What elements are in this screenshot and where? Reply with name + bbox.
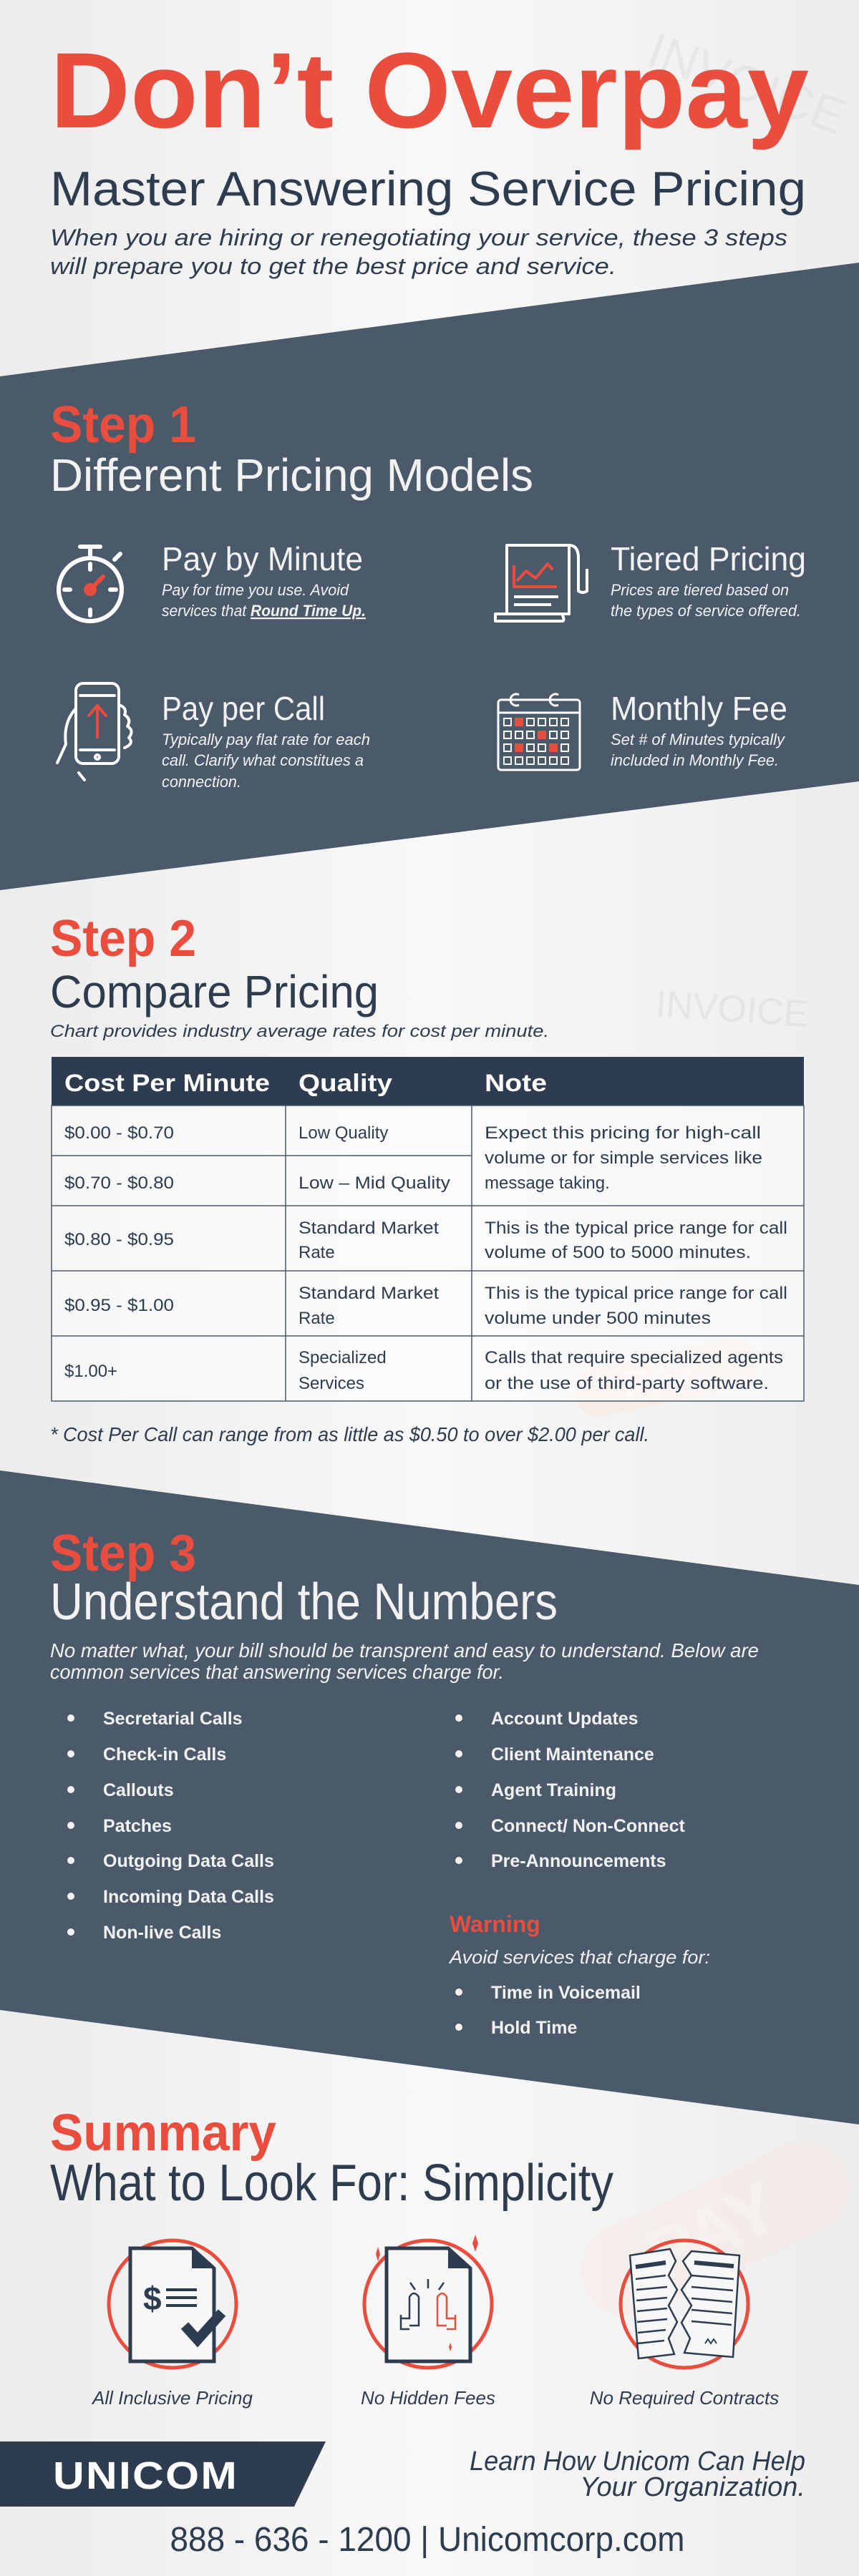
summary heading xyxy=(50,2104,613,2212)
faint decorative invoices: INVOICE xyxy=(641,22,853,145)
tiered pricing: Prices are tiered based on xyxy=(611,581,789,599)
step 3 heading: Understand the Numbers xyxy=(50,1574,558,1631)
icon: no required contracts xyxy=(621,2240,748,2368)
monthly fee: Monthly Fee xyxy=(611,690,787,727)
icon: tiered pricing document xyxy=(495,545,587,621)
table: pricing: Specialized xyxy=(299,1348,387,1367)
icon: phone in hand xyxy=(57,683,132,780)
table: pricing: Expect this pricing for high-call xyxy=(485,1123,761,1143)
table: pricing: Calls that require specialized agents xyxy=(485,1348,783,1367)
footnote: * Cost Per Call can range from as little as $0.50 to over $2.00 per call. xyxy=(50,1423,649,1445)
icon: calendar xyxy=(498,694,580,770)
table: pricing: $1.00+ xyxy=(64,1362,117,1381)
footer banner with logo xyxy=(0,2441,326,2507)
table: pricing: Cost Per Minute xyxy=(64,1070,270,1097)
table: pricing: $0.95 - $1.00 xyxy=(64,1296,174,1315)
warning callout: Hold Time xyxy=(491,2018,577,2038)
pay by minute: Pay by Minute xyxy=(162,540,363,577)
bullet list: left column: Secretarial Calls xyxy=(103,1709,243,1729)
pay per call: call. Clarify what constitues a xyxy=(162,751,364,769)
table: pricing: volume of 500 to 5000 minutes. xyxy=(485,1243,751,1262)
pay per call: Typically pay flat rate for each xyxy=(162,731,370,748)
step 2 heading xyxy=(50,910,549,1041)
bullet list: left column xyxy=(67,1709,274,1943)
panel: step 3 band xyxy=(0,1470,859,2124)
bullet list: right column: Account Updates xyxy=(491,1709,639,1729)
table: pricing: message taking. xyxy=(485,1174,610,1193)
step 3 intro text: No matter what, your bill should be transprent and easy to understand. Below are xyxy=(50,1639,759,1662)
pay by minute: Pay for time you use. Avoid xyxy=(162,581,349,599)
warning callout: Time in Voicemail xyxy=(491,1983,641,2003)
table: pricing: $0.70 - $0.80 xyxy=(64,1174,174,1193)
call to action: Learn How Unicom Can Help xyxy=(470,2446,805,2477)
bullet list: left column: Non-live Calls xyxy=(103,1923,221,1943)
table: pricing: Standard Market xyxy=(299,1219,439,1238)
faint decorative invoices: PAY xyxy=(634,2167,791,2296)
summary heading: Summary xyxy=(50,2104,276,2162)
summary heading: What to Look For: Simplicity xyxy=(50,2155,613,2212)
bullet list: right column xyxy=(455,1709,685,1871)
footer banner with logo: UNICOM xyxy=(53,2454,238,2497)
step 1 heading: Step 1 xyxy=(50,396,196,454)
step 2 heading: Compare Pricing xyxy=(50,966,379,1018)
table: pricing: or the use of third-party software. xyxy=(485,1374,769,1393)
icon: all inclusive pricing xyxy=(109,2240,236,2368)
table: pricing: volume or for simple services like xyxy=(485,1148,762,1168)
table: pricing: Services xyxy=(299,1374,364,1393)
table: pricing: Rate xyxy=(299,1309,335,1328)
table: pricing: Low Quality xyxy=(299,1123,388,1143)
table: pricing: Note xyxy=(485,1070,547,1097)
faint decorative invoices: INVOICE xyxy=(654,983,810,1035)
table: pricing: Quality xyxy=(299,1070,392,1097)
table: pricing: Low – Mid Quality xyxy=(299,1174,450,1193)
bullet list: left column: Check-in Calls xyxy=(103,1745,226,1765)
step 3 intro text: common services that answering services charge for. xyxy=(50,1661,504,1683)
step 1 heading: Different Pricing Models xyxy=(50,449,533,501)
faint decorative invoices: PAY xyxy=(619,1349,703,1409)
table: pricing: This is the typical price range for call xyxy=(485,1219,787,1238)
step 3 intro text xyxy=(50,1639,759,1683)
table: pricing: This is the typical price range for call xyxy=(485,1284,787,1303)
summary labels xyxy=(91,2387,779,2409)
step 3 heading xyxy=(50,1525,558,1631)
pay by minute: services that Round Time Up. xyxy=(162,602,366,620)
summary labels: No Required Contracts xyxy=(590,2387,779,2409)
step 3 heading: Step 3 xyxy=(50,1525,196,1582)
table: pricing: Rate xyxy=(299,1243,335,1262)
summary labels: All Inclusive Pricing xyxy=(91,2387,253,2409)
table: pricing: $0.80 - $0.95 xyxy=(64,1230,174,1249)
pay by minute xyxy=(162,540,366,620)
step 1 heading xyxy=(50,396,533,501)
bullet list: left column: Incoming Data Calls xyxy=(103,1887,274,1907)
table: pricing xyxy=(52,1057,804,1401)
tiered pricing: the types of service offered. xyxy=(611,602,801,620)
pay per call: connection. xyxy=(162,773,241,791)
warning callout xyxy=(448,1911,710,2038)
summary labels: No Hidden Fees xyxy=(361,2387,495,2409)
tiered pricing xyxy=(611,540,806,620)
faint decorative invoices xyxy=(566,22,859,2331)
icon: stopwatch xyxy=(59,547,122,621)
warning callout: Warning xyxy=(450,1911,540,1937)
monthly fee xyxy=(611,690,787,769)
pay per call xyxy=(162,690,370,791)
icon: all inclusive pricing: $ xyxy=(143,2280,162,2317)
monthly fee: Set # of Minutes typically xyxy=(611,731,786,748)
bullet list: right column: Agent Training xyxy=(491,1780,616,1800)
title: Don’t Overpay xyxy=(50,30,809,150)
intro text: When you are hiring or renegotiating your service, these 3 steps xyxy=(50,225,787,250)
intro text xyxy=(50,225,787,279)
call to action: Your Organization. xyxy=(580,2472,805,2502)
icon: no hidden fees xyxy=(364,2235,492,2368)
tiered pricing: Tiered Pricing xyxy=(611,540,806,577)
table: pricing: $0.00 - $0.70 xyxy=(64,1123,174,1143)
panel: step 1 band xyxy=(0,263,859,890)
table: pricing: Standard Market xyxy=(299,1284,439,1303)
table: pricing: volume under 500 minutes xyxy=(485,1309,711,1328)
subtitle: Master Answering Service Pricing xyxy=(50,162,806,216)
bullet list: left column: Outgoing Data Calls xyxy=(103,1851,274,1871)
bullet list: left column: Patches xyxy=(103,1816,172,1836)
bullet list: right column: Connect/ Non-Connect xyxy=(491,1816,685,1836)
contact line: 888 - 636 - 1200 | Unicomcorp.com xyxy=(170,2521,684,2559)
step 2 heading: Chart provides industry average rates for cost per minute. xyxy=(50,1022,549,1041)
bullet list: right column: Pre-Announcements xyxy=(491,1851,666,1871)
bullet list: left column: Callouts xyxy=(103,1780,174,1800)
step 2 heading: Step 2 xyxy=(50,910,196,967)
pay per call: Pay per Call xyxy=(162,690,325,727)
call to action xyxy=(470,2446,805,2502)
intro text: will prepare you to get the best price and service. xyxy=(50,253,616,279)
monthly fee: included in Monthly Fee. xyxy=(611,751,779,769)
warning callout: Avoid services that charge for: xyxy=(448,1946,710,1968)
bullet list: right column: Client Maintenance xyxy=(491,1745,654,1765)
